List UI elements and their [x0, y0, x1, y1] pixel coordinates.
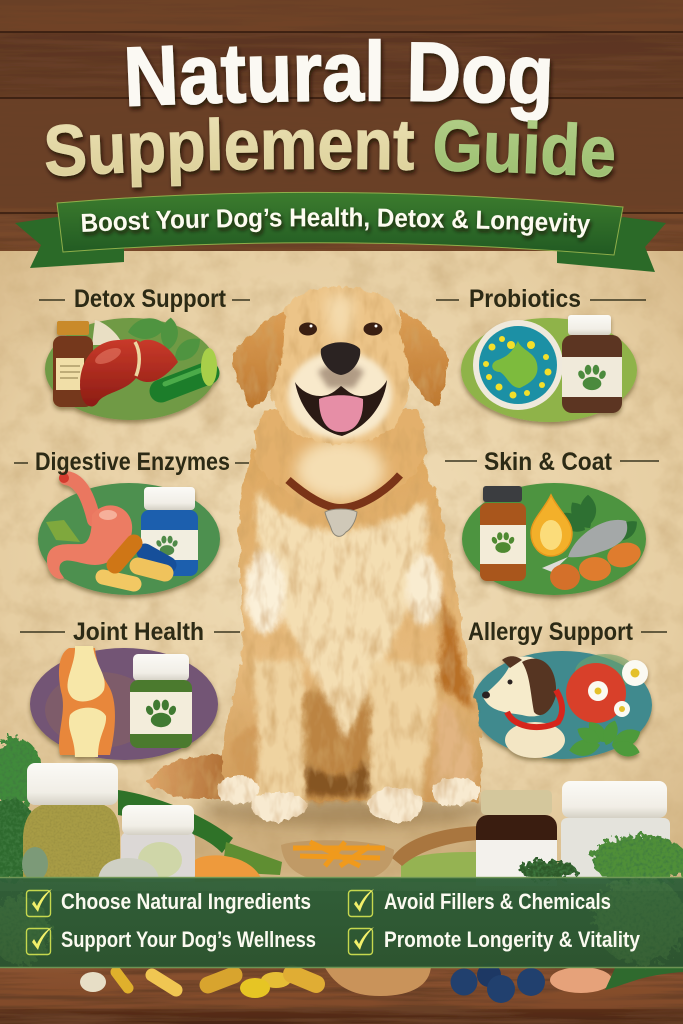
label: Digestive Enzymes: Digestive Enzymes [35, 448, 230, 476]
dog shadow [195, 794, 495, 826]
label: Skin & Coat: Skin & Coat [484, 448, 613, 476]
dog ears [233, 311, 448, 408]
floor shading under dog [135, 809, 555, 881]
dog collar [288, 475, 400, 508]
icon: joint health [30, 646, 218, 760]
dog mouth [295, 380, 387, 436]
right zucchini [401, 852, 478, 882]
label: Allergy Support: Allergy Support [468, 618, 634, 646]
dog tongue [319, 395, 363, 432]
icon: digestive enzymes [38, 473, 220, 595]
dog nose [321, 342, 360, 375]
banner herb texture [0, 876, 683, 964]
checklist item: Avoid Fillers & Chemicals [348, 889, 611, 916]
checklist banner [0, 876, 683, 968]
dog face light areas [288, 351, 392, 439]
wood shelf [0, 968, 683, 1024]
checklist item: Support Your Dog's Wellness [26, 927, 316, 954]
dog tail [146, 754, 240, 799]
wooden spoon [392, 826, 478, 866]
dog eyes [299, 322, 382, 336]
dog neck ruff [254, 410, 426, 506]
title line 2: Supplement Guide [46, 117, 618, 193]
icon: detox support [45, 315, 217, 420]
checklist item: Support Your Dog's Wellness: Support Your Dog’s Wellness [61, 927, 316, 952]
white jar [561, 781, 670, 884]
checklist item: Choose Natural Ingredients: Choose Natural Ingredients [61, 889, 311, 914]
dog paws [217, 776, 479, 822]
title [46, 38, 618, 193]
cucumber [118, 790, 233, 853]
dog muzzle shade [318, 364, 364, 388]
ribbon text: Boost Your Dog’s Health, Detox & Longevity [80, 207, 594, 243]
pills on shelf [80, 963, 683, 1003]
dog brow blaze [327, 295, 353, 345]
title line 1: Natural Dog [126, 38, 554, 127]
dog [146, 287, 495, 826]
bottom supplements and herbs [0, 738, 683, 886]
sage leaf and glass dome [22, 847, 159, 881]
dog neck light fur [296, 440, 384, 500]
clear jar [121, 805, 195, 882]
wooden bowl with carrot sticks [281, 840, 394, 882]
dog body [222, 440, 482, 805]
label: Joint Health: Joint Health [73, 618, 204, 646]
label: Detox Support: Detox Support [74, 285, 227, 313]
left herbs [0, 738, 42, 882]
dog tag [325, 509, 357, 536]
orange squash [195, 855, 262, 882]
parchment background [0, 251, 683, 891]
category labels and rules [14, 285, 667, 646]
icon: skin and coat [462, 483, 646, 595]
zucchini [222, 842, 282, 875]
label: Probiotics: Probiotics [469, 285, 581, 313]
subtitle ribbon [15, 192, 666, 272]
checklist item: Avoid Fillers & Chemicals: Avoid Fillers & Chemicals [384, 889, 611, 914]
dog head [270, 287, 410, 444]
icon: probiotics [461, 315, 637, 422]
icon: allergy support [472, 651, 652, 760]
left jar [23, 763, 120, 882]
dark bottle [476, 790, 557, 886]
wood header background [0, 0, 683, 256]
right herbs [520, 835, 683, 885]
checklist item: Promote Longerity & Vitality: Promote Longerity & Vitality [384, 927, 641, 952]
